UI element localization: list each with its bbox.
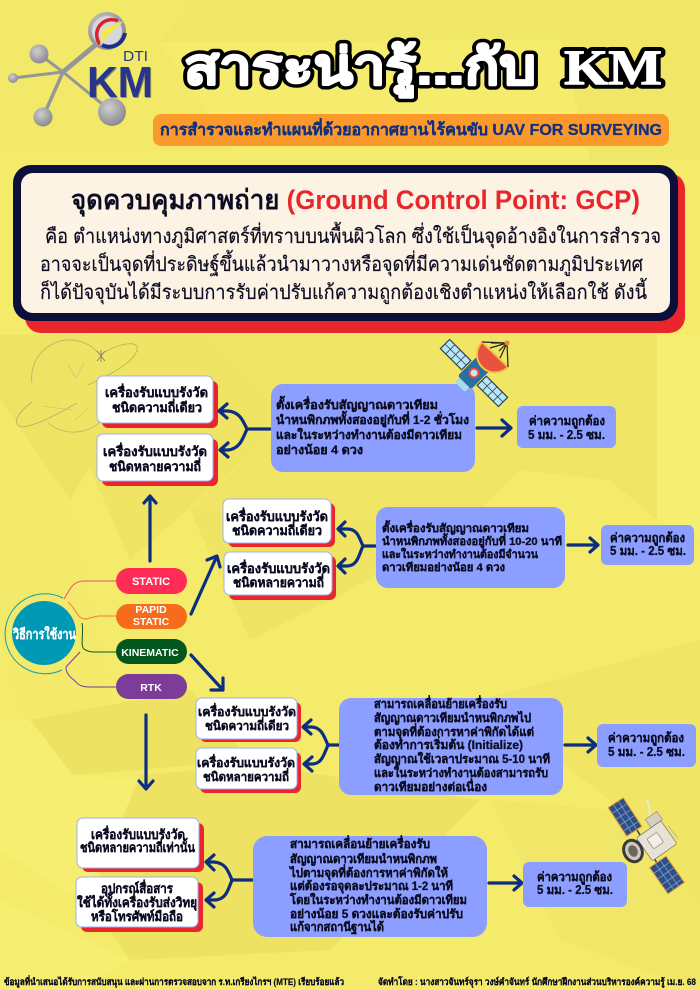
- card: single frequency: ชนิดความถี่เดียว: [232, 521, 322, 538]
- text box: rapid static procedure: และในระหว่างทำงานต้องมีจำนวน: [382, 547, 538, 561]
- text box: static procedure: [271, 384, 475, 472]
- text box: kinematic procedure: สัญญาณใช้เวลาประมาณ 5-10 นาที: [374, 751, 550, 766]
- text box: static procedure: และในระหว่างทำงานต้องมีดาวเทียม: [276, 427, 462, 442]
- icon: satellite with dish: [431, 328, 519, 416]
- arrow: [565, 738, 596, 752]
- text box: kinematic procedure: และในระหว่างทำงานต้องสามารถรับ: [374, 765, 548, 780]
- text box: kinematic procedure: สามารถเคลื่อนย้ายเครื่องรับ: [374, 695, 507, 711]
- pill: RTK: [116, 674, 187, 699]
- card: multi frequency: ชนิดหลายความถี่: [109, 457, 201, 474]
- usage methods hub: [5, 568, 187, 699]
- text box: rtk procedure: สามารถเคลื่อนย้ายเครื่องรับ: [290, 835, 430, 851]
- title: KM: [564, 39, 662, 95]
- text box: rtk procedure: ไปตามจุดที่ต้องการหาค่าพิกัดให้: [288, 864, 448, 881]
- text box: rtk procedure: อย่างน้อย 5 ดวงและต้องรับค่าปรับ: [290, 907, 463, 921]
- text box: static procedure: อย่างน้อย 4 ดวง: [276, 443, 363, 457]
- card: communication device: [76, 877, 203, 932]
- accuracy box: ค่าความถูกต้อง: [537, 870, 612, 885]
- arrow: fork: [206, 855, 252, 907]
- text box: kinematic procedure: [339, 695, 563, 795]
- card: single frequency: เครื่องรับแบบรังวัด: [105, 383, 208, 400]
- icon: planet doodle: [16, 340, 137, 432]
- card: multi frequency: [97, 434, 218, 486]
- text box: rapid static procedure: [376, 507, 565, 588]
- text box: rtk procedure: แต่ต้องรอจุดละประมาณ 1-2 นาที: [290, 879, 453, 894]
- card: multi frequency: [224, 552, 336, 600]
- arrow: fork: [219, 404, 270, 457]
- card: multi frequency only: ชนิดหลายความถี่เท่านั้น: [80, 837, 195, 855]
- accuracy box: ค่าความถูกต้อง: [529, 414, 605, 429]
- text box: static procedure: นำหนพิกภพทั้งสองอยู่กับที่ 1-2 ชั่วโมง: [276, 410, 469, 428]
- card: multi frequency: เครื่องรับแบบรังวัด: [103, 442, 207, 459]
- group: KINEMATIC branch: [196, 695, 696, 795]
- card: single frequency: ชนิดความถี่เดียว: [205, 717, 289, 733]
- card: multi frequency: เครื่องรับแบบรังวัด: [227, 559, 330, 576]
- text: GCP definition: อาจจะเป็นจุดที่ประดิษฐ์ขึ้นแล้วนำมาวางหรือจุดที่มีความเด่นชัดตามภูมิประเทศ: [40, 250, 643, 277]
- card: communication device: หรือโทรศัพท์มือถือ: [91, 908, 183, 924]
- heading: GCP: จุดควบคุมภาพถ่าย (Ground Control Point: GCP): [71, 185, 640, 217]
- accuracy box: [601, 525, 694, 565]
- arrow: [477, 420, 511, 436]
- group: RAPID STATIC branch: [223, 499, 694, 600]
- accuracy box: 5 มม. - 2.5 ซม.: [528, 428, 605, 442]
- text box: rtk procedure: โดยในระหว่างทำงานต้องมีดาวเทียม: [289, 892, 467, 907]
- accuracy box: 5 มม. - 2.5 ซม.: [610, 544, 686, 558]
- subtitle banner: [153, 114, 669, 146]
- text box: kinematic procedure: สัญญาณดาวเทียมนำหนพิกภพไป: [374, 710, 531, 725]
- text: GCP definition: [40, 222, 661, 305]
- text box: rtk procedure: สัญญาณดาวเทียมนำหนพิกภพ: [290, 852, 437, 866]
- arrow: to rapid static: [191, 556, 220, 614]
- text box: kinematic procedure: ต้องทำการเริ่มต้น (Initialize): [374, 736, 523, 752]
- accuracy box: ค่าความถูกต้อง: [610, 531, 685, 546]
- accuracy box: [517, 406, 616, 448]
- title: KM: [564, 39, 662, 95]
- hub circle: [12, 601, 76, 665]
- card: single frequency: [97, 376, 218, 428]
- group: STATIC branch: [97, 376, 616, 486]
- logo: DTI KM: KM: [87, 58, 153, 107]
- panel: GCP definition: [13, 165, 685, 333]
- text box: rtk procedure: [253, 835, 487, 937]
- pill: STATIC: [116, 568, 187, 594]
- card: single frequency: เครื่องรับแบบรังวัด: [226, 507, 328, 524]
- card: multi frequency: เครื่องรับแบบรังวัด: [197, 754, 295, 770]
- accuracy box: [523, 862, 627, 907]
- card: multi frequency: ชนิดหลายความถี่: [203, 768, 289, 784]
- card: single frequency: [223, 499, 335, 547]
- text box: rapid static procedure: ตั้งเครื่องรับสัญญาณดาวเทียม: [382, 520, 529, 535]
- arrow: fork: [338, 522, 375, 573]
- logo: DTI KM: [8, 12, 154, 126]
- accuracy box: 5 มม. - 2.5 ซม.: [537, 883, 613, 897]
- rings and connectors: [5, 581, 116, 687]
- text box: rapid static procedure: นำหนพิกภพทั้งสองอยู่กับที่ 10-20 นาที: [382, 533, 562, 549]
- pill: KINEMATIC: KINEMATIC: [121, 647, 179, 659]
- text box: static procedure: ตั้งเครื่องรับสัญญาณดาวเทียม: [276, 395, 438, 412]
- title: สาระน่ารู้...กับ: [184, 39, 536, 98]
- pill: KINEMATIC: [116, 639, 187, 664]
- title: [184, 39, 662, 98]
- card: multi frequency: ชนิดหลายความถี่: [233, 573, 324, 590]
- card: multi frequency only: [77, 818, 204, 872]
- footer: source note: ข้อมูลที่นำเสนอได้รับการสนับสนุน และผ่านการตรวจสอบจาก ร.ท.เกรียงไกรฯ (MTE) เรียบร้อยแล้ว: [4, 974, 344, 989]
- accuracy box: 5 มม. - 2.5 ซม.: [608, 745, 685, 759]
- text box: rapid static procedure: ดาวเทียมอย่างน้อย 4 ดวง: [382, 561, 505, 574]
- card: single frequency: [196, 698, 301, 742]
- card: communication device: อุปกรณ์สื่อสาร: [101, 879, 173, 897]
- text box: rtk procedure: แก้จากสถานีฐานได้: [290, 919, 384, 935]
- logo: DTI KM: DTI: [123, 48, 148, 65]
- arrow: fork: [303, 720, 339, 771]
- arrow: to kinematic: [191, 655, 223, 690]
- logo: DTI KM: KM: [88, 59, 154, 108]
- arrow: [489, 876, 522, 890]
- subtitle banner: การสำรวจและทำแผนที่ด้วยอากาศยานไร้คนขับ UAV FOR SURVEYING: [160, 118, 662, 139]
- arrow: to rtk: [139, 715, 153, 789]
- card: multi frequency: [196, 748, 301, 793]
- pill: PAPID STATIC: STATIC: [133, 616, 170, 628]
- group: RTK branch: [76, 818, 627, 937]
- icon: satellite white: [608, 798, 684, 894]
- pill: STATIC: STATIC: [132, 576, 170, 588]
- pill: PAPID STATIC: [116, 604, 187, 629]
- title: สาระน่ารู้...กับ: [184, 39, 536, 98]
- text box: kinematic procedure: ตามจุดที่ต้องการหาค่าพิกัดได้แต่: [374, 723, 534, 740]
- text: GCP definition: ก็ได้ปัจจุบันได้มีระบบการรับค่าปรับแก้ความถูกต้องเชิงตำแหน่งให้เลือกใช้ ดังนี้: [40, 278, 647, 305]
- accuracy box: ค่าความถูกต้อง: [608, 731, 684, 746]
- arrow: [568, 538, 598, 552]
- card: multi frequency only: เครื่องรับแบบรังวัด: [91, 825, 185, 842]
- card: communication device: ใช้ได้ทั้งเครื่องรับส่งวิทยุ: [77, 892, 197, 911]
- card: single frequency: เครื่องรับแบบรังวัด: [198, 703, 296, 719]
- accuracy box: [597, 724, 696, 767]
- arrow: to static: [144, 496, 156, 561]
- hub circle: วิธีการใช้งาน: [12, 625, 76, 642]
- pill: PAPID STATIC: PAPID: [135, 604, 167, 616]
- pill: RTK: RTK: [140, 682, 162, 694]
- card: single frequency: ชนิดความถี่เดียว: [112, 398, 202, 415]
- text box: kinematic procedure: ดาวเทียมอย่างต่อเนื่อง: [374, 778, 487, 794]
